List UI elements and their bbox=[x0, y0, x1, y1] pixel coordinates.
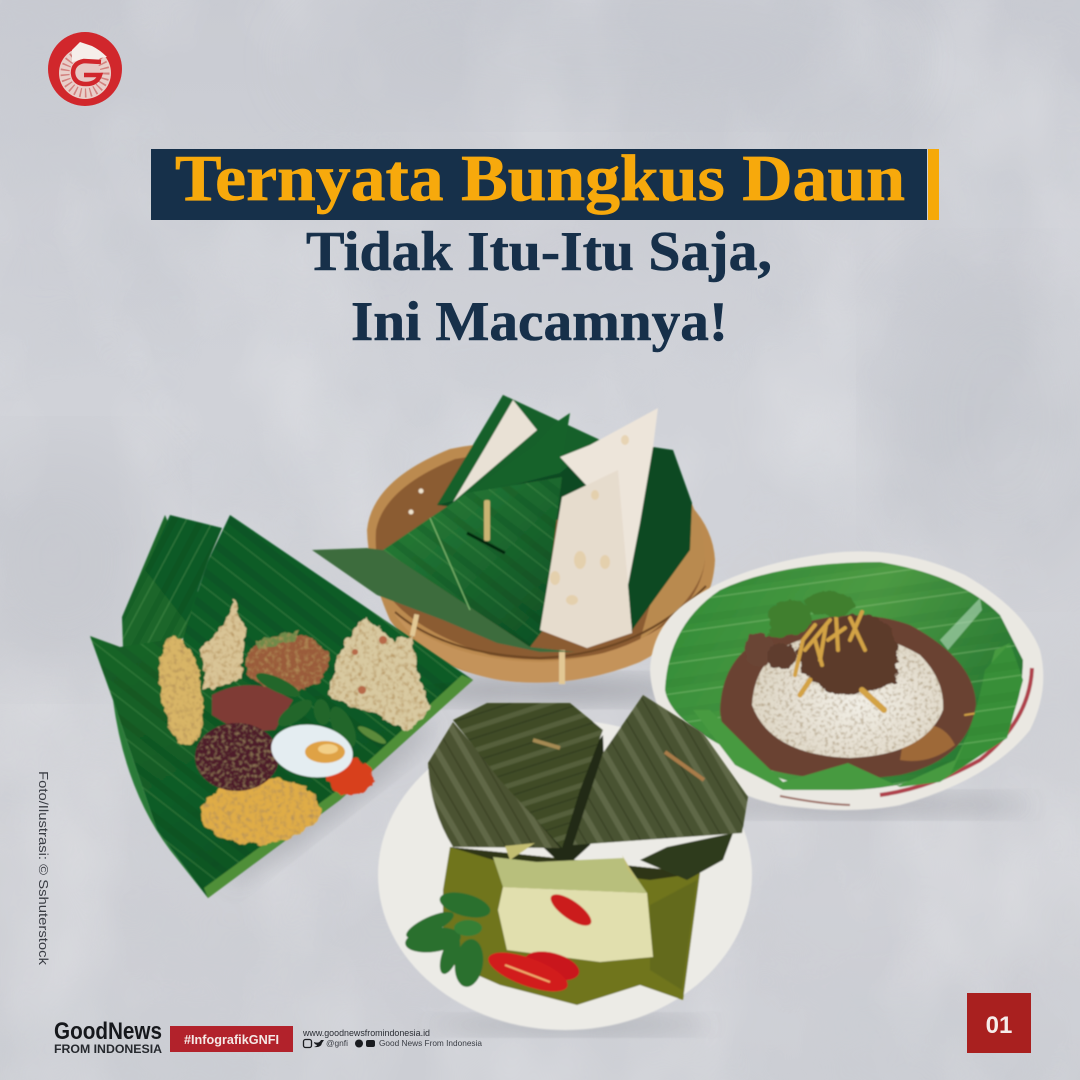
food: salted egg bbox=[268, 720, 356, 782]
footer: GoodNews logo: GoodNews bbox=[54, 1018, 162, 1045]
basket bbox=[367, 443, 715, 684]
footer: GoodNews logo: FROM INDONESIA bbox=[54, 1044, 162, 1056]
basil sprig bbox=[403, 888, 493, 989]
footer: website and social handles: @gnfi bbox=[326, 1038, 348, 1048]
parsley garnish bbox=[768, 591, 854, 639]
top large leaf bbox=[180, 515, 473, 770]
white plate bbox=[378, 720, 752, 1030]
front leaf flap bbox=[693, 643, 1023, 790]
footer: hashtag tag bbox=[170, 1026, 293, 1052]
back leaf bbox=[437, 395, 692, 633]
middle leaf bbox=[145, 515, 222, 623]
icon: youtube bbox=[366, 1040, 375, 1047]
footer: website and social handles: www.goodnewsfromindonesia.id bbox=[302, 1028, 430, 1039]
footer: GoodNews logo bbox=[54, 1018, 162, 1056]
title bar: orange accent bbox=[928, 149, 939, 220]
title bar: navy highlight bbox=[151, 149, 927, 220]
white tempeh packets bbox=[560, 408, 658, 630]
icon: instagram bbox=[304, 1040, 312, 1048]
main front leaf bbox=[90, 636, 473, 898]
plate bbox=[650, 551, 1043, 810]
food: left fritter bbox=[153, 634, 209, 748]
photo: nasi with beef on leaf plate bbox=[650, 551, 1043, 815]
under leaf bbox=[443, 847, 700, 1005]
middle wrapped parcel bbox=[453, 703, 603, 848]
title line 2: Tidak Itu-Itu Saja, bbox=[306, 221, 772, 283]
banana leaf lining bbox=[665, 562, 1023, 790]
left wrapped parcel bbox=[428, 722, 560, 848]
chili slice on cake bbox=[546, 889, 596, 931]
title line 3: Ini Macamnya! bbox=[351, 291, 728, 353]
steamed pepes cake bbox=[493, 843, 653, 962]
food: black rice ball bbox=[195, 723, 279, 791]
dark knot between parcels bbox=[525, 735, 605, 868]
big folded front leaf bbox=[383, 477, 562, 647]
title line 1: Ternyata Bungkus Daun bbox=[175, 142, 905, 215]
footer: website and social handles: Good News From Indonesia bbox=[379, 1038, 482, 1048]
page number badge bbox=[967, 993, 1031, 1053]
food: top cracker bbox=[200, 598, 246, 690]
photo: tempeh wrapped in leaves in bamboo basket bbox=[312, 395, 715, 702]
beef chunks bbox=[746, 615, 898, 694]
food: urap vegetables bbox=[246, 630, 328, 692]
photo credit: Foto/Ilustrasi: © Sshuterstock bbox=[36, 771, 50, 966]
ginger shreds bbox=[795, 612, 990, 715]
photo: nasi campur on banana leaf bbox=[90, 515, 473, 898]
food: basil leaves bbox=[253, 669, 388, 751]
food: meat slice bbox=[212, 685, 293, 732]
page number badge: 01 bbox=[986, 1012, 1012, 1039]
footer: hashtag tag: #InfografikGNFI bbox=[184, 1032, 279, 1047]
icon: twitter bbox=[314, 1040, 324, 1047]
right wrapped parcel bbox=[573, 695, 748, 880]
leaf tail and bottom leaf bbox=[312, 548, 575, 652]
rice mound bbox=[752, 633, 943, 758]
red chili slices bbox=[484, 944, 582, 1000]
back tempeh packet bbox=[453, 400, 537, 502]
gravy bbox=[720, 615, 976, 779]
back-left leaf bbox=[122, 515, 210, 647]
logo: red circle dragon emblem bbox=[48, 32, 122, 106]
icon: facebook bbox=[355, 1040, 363, 1048]
footer: website and social handles bbox=[302, 1028, 482, 1048]
title block bbox=[151, 142, 939, 353]
food: sambal bbox=[327, 758, 373, 796]
photo: pepes wrapped in banana leaf on white plate bbox=[378, 695, 752, 1033]
small upper leaf bbox=[467, 413, 570, 493]
food: corn fritter bbox=[198, 774, 322, 848]
food: right peanut cracker bbox=[328, 617, 431, 732]
